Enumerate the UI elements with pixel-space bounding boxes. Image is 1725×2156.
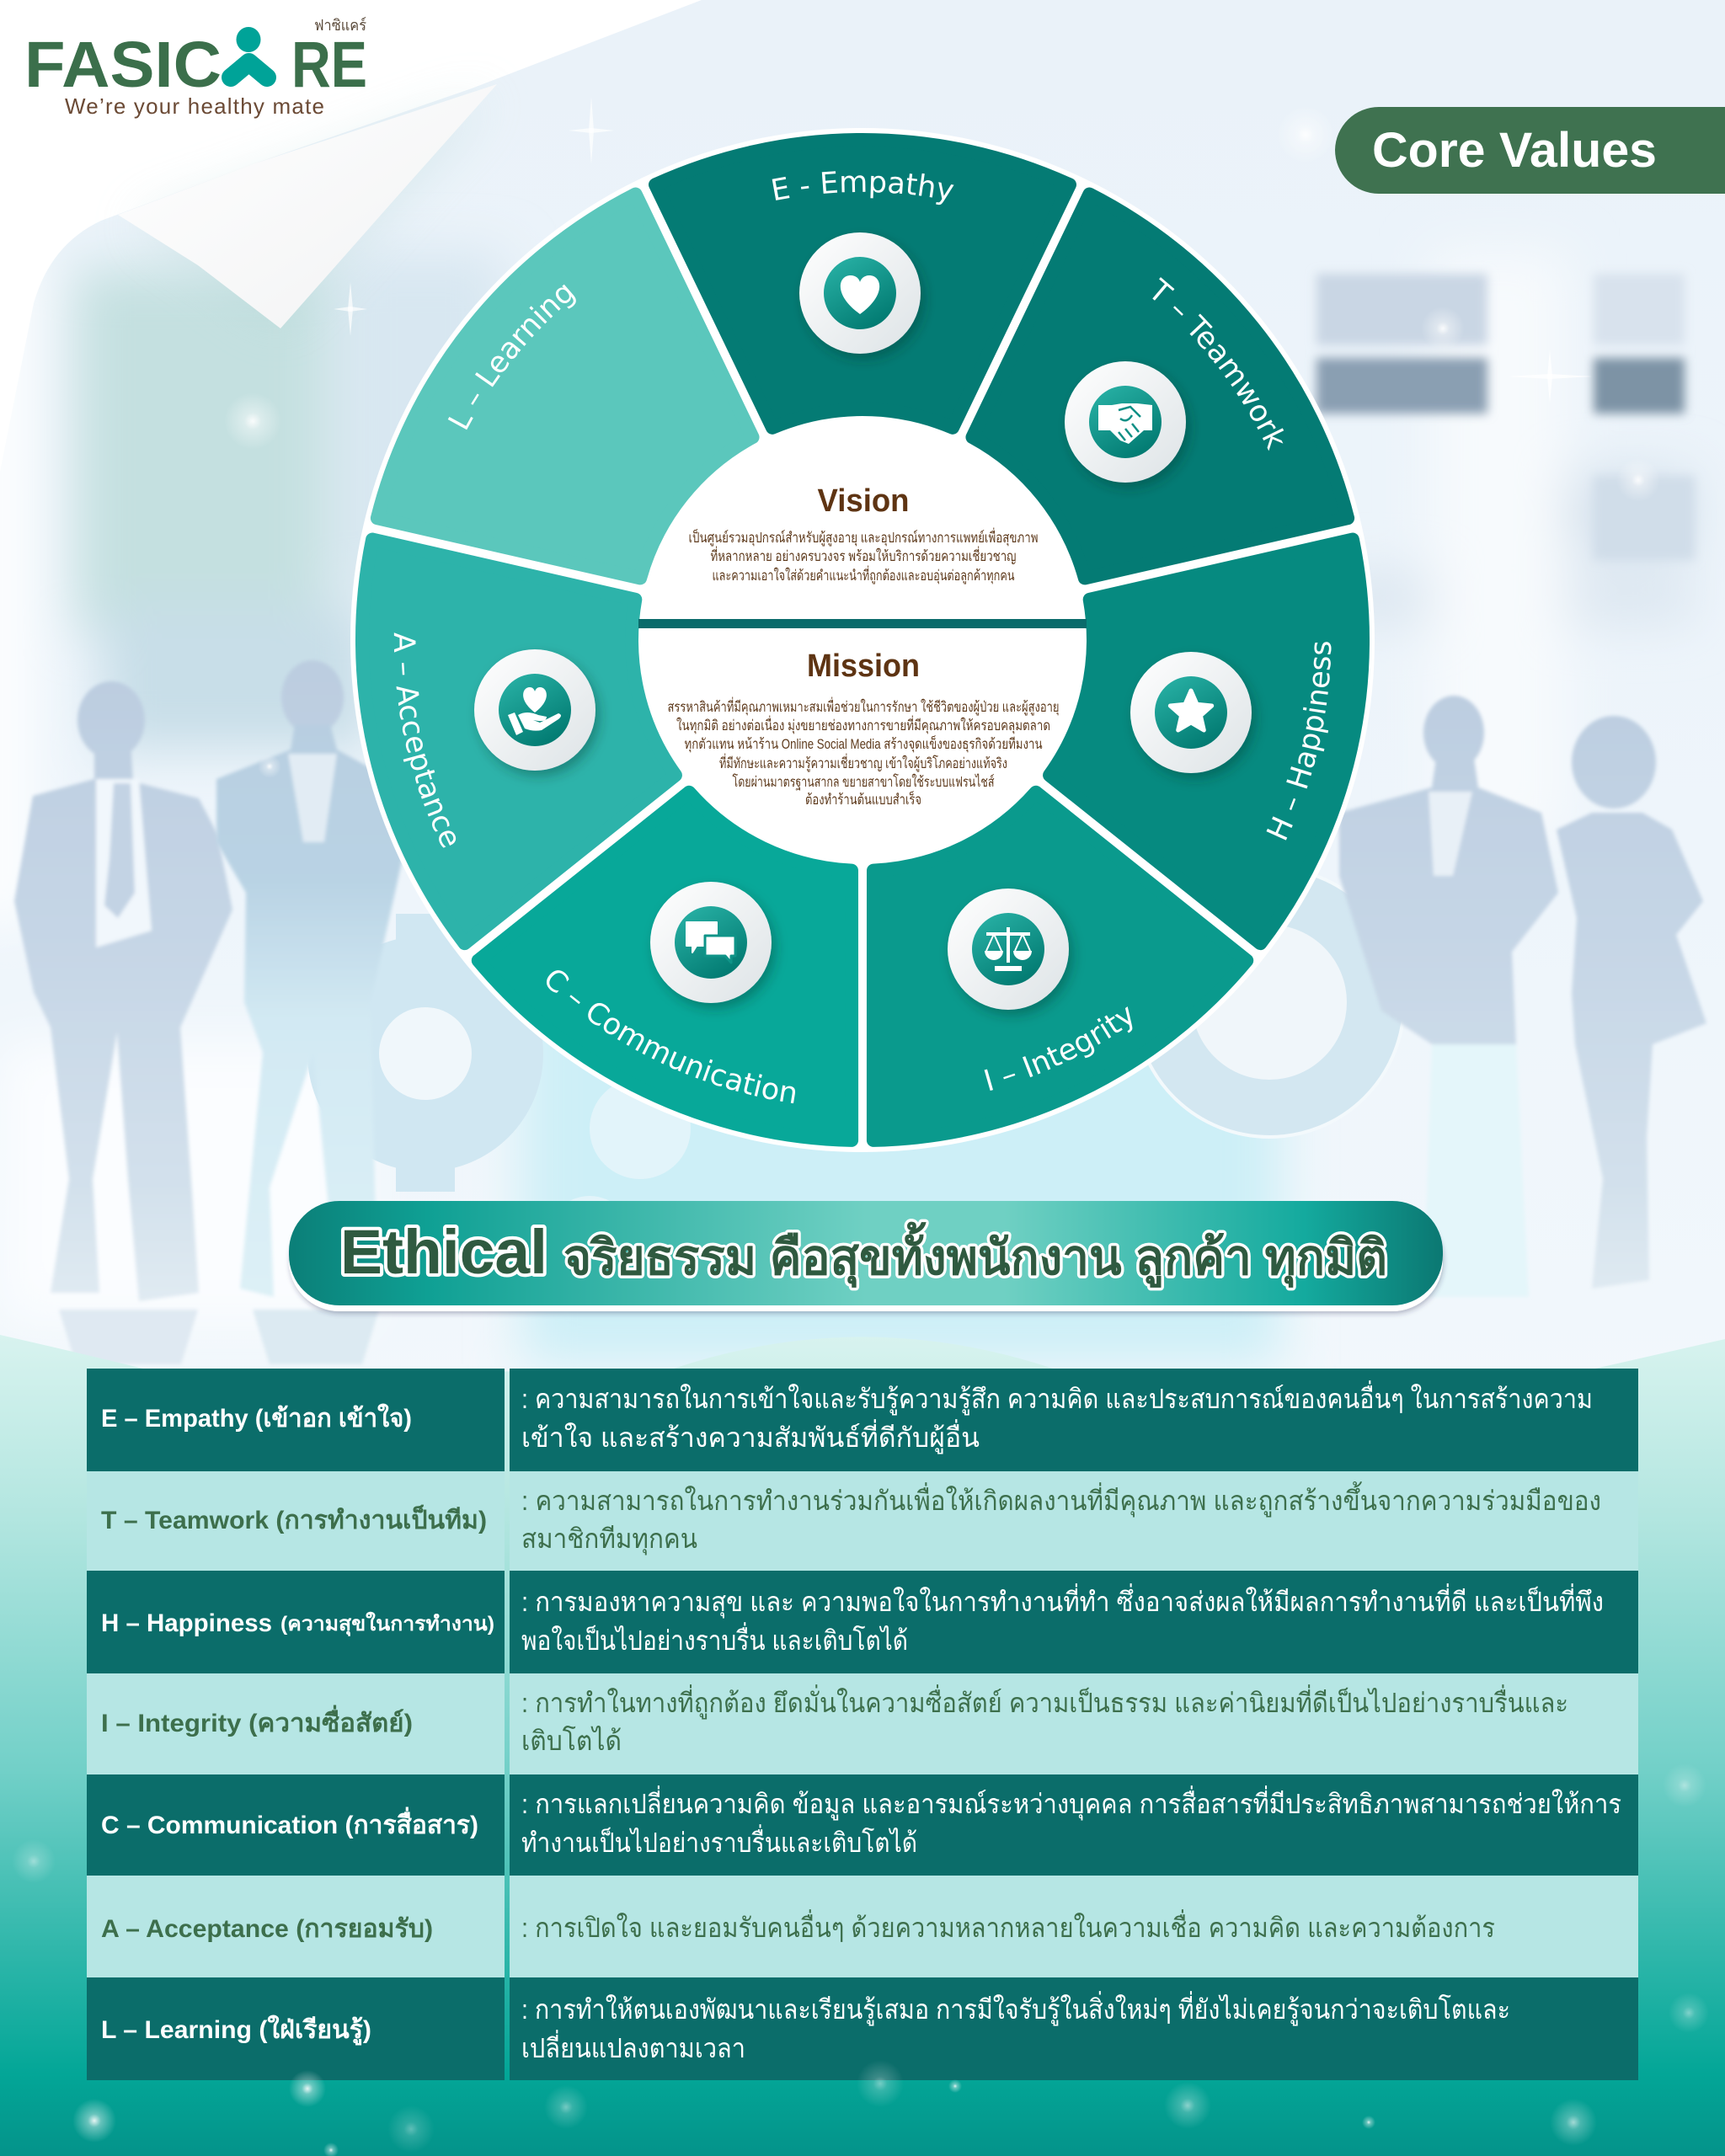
row: teamwork: T – Teamwork (การทำงานเป็นทีม) [101, 1504, 487, 1534]
row: communication: : การแลกเปลี่ยนความคิด ข้อมูล และอารมณ์ระหว่างบุคคล การสื่อสารที่มีประสิทธิภาพสามารถช่วยให้การ [521, 1785, 1621, 1821]
row: happiness: : การมองหาความสุข และ ความพอใจในการทำงานที่ทำ ซึ่งอาจส่งผลให้มีผลการทำงานที่ดี และเป็นที่พึง [521, 1583, 1604, 1619]
row: empathy: E – Empathy (เข้าอก เข้าใจ) [101, 1403, 412, 1433]
vision text: Vision [817, 483, 910, 519]
label: acceptance: A – Acceptance [394, 632, 457, 848]
mission text: ในทุกมิติ อย่างต่อเนื่อง มุ่งขยายช่องทางการขายที่มีคุณภาพให้ครอบคลุมตลาด [676, 715, 1050, 734]
icon: hand with heart [474, 649, 595, 771]
row: happiness: (ความสุขในการทำงาน) [280, 1611, 494, 1637]
silhouette: woman [1557, 716, 1706, 1289]
label: teamwork: T – Teamwork [1152, 277, 1284, 451]
label: happiness: H – Happiness [1267, 642, 1331, 841]
row: happiness: พอใจเป็นไปอย่างราบรื่น และเติบโตได้ [521, 1622, 908, 1656]
row: empathy [87, 1369, 1638, 1471]
mission text: ที่มีทักษะและความรู้ความเชี่ยวชาญ เข้าใจผู้บริโภคอย่างแท้จริง [719, 753, 1007, 772]
core values wheel [350, 128, 1375, 1152]
divider band [638, 619, 1087, 628]
row: integrity: : การทำในทางที่ถูกต้อง ยึดมั่นในความซื่อสัตย์ ความเป็นธรรม และค่านิยมที่ดีเป็นไปอย่างราบรื่นและ [521, 1684, 1568, 1720]
ethical banner: จริยธรรม คือสุขทั้งพนักงาน ลูกค้า ทุกมิติ [563, 1222, 1387, 1289]
mission text: สรรหาสินค้าที่มีคุณภาพเหมาะสมเพื่อช่วยในการรักษา ใช้ชีวิตของผู้ป่วย และผู้สูงอายุ [667, 696, 1060, 716]
wedge: empathy [655, 140, 1070, 428]
label: empathy: E - Empathy [772, 171, 953, 205]
row: teamwork: : ความสามารถในการทำงานร่วมกันเพื่อให้เกิดผลงานที่มีคุณภาพ และถูกสร้างขึ้นจากความร่วมมือของ [521, 1481, 1601, 1518]
logo: We’re your healthy mate [65, 93, 324, 119]
row: acceptance: A – Acceptance (การยอมรับ) [101, 1915, 433, 1943]
row: communication: ทำงานเป็นไปอย่างราบรื่นและเติบโตได้ [521, 1824, 917, 1858]
row: acceptance: : การเปิดใจ และยอมรับคนอื่นๆ ด้วยความหลากหลายในความเชื่อ ความคิด และความต้องการ [521, 1909, 1495, 1943]
background: lower teal gradient [0, 1335, 1725, 2156]
mission text: ต้องทำร้านต้นแบบสำเร็จ [805, 790, 921, 808]
row: happiness: H – Happiness [101, 1609, 272, 1637]
mission text [667, 648, 1060, 808]
row: empathy: เข้าใจ และสร้างความสัมพันธ์ที่ดีกับผู้อื่น [521, 1419, 980, 1454]
ethical banner [289, 1201, 1443, 1311]
bokeh lights [12, 1764, 1709, 2156]
row: integrity: I – Integrity (ความซื่อสัตย์) [101, 1705, 413, 1737]
silhouette: man left [14, 681, 232, 1364]
row: acceptance [87, 1876, 1638, 1977]
icon: star [1130, 652, 1252, 773]
silhouette: man right [1339, 696, 1558, 1297]
logo: ฟาซิแคร์ [314, 17, 366, 34]
wedge: acceptance [328, 485, 702, 953]
silhouette: man second [216, 660, 404, 1364]
logo: RE [291, 29, 367, 101]
vision text [689, 483, 1038, 584]
icon: handshake [1065, 361, 1186, 483]
row: empathy: : ความสามารถในการเข้าใจและรับรู้ความรู้สึก ความคิด และประสบการณ์ของคนอื่นๆ ในการสร้างความ [521, 1380, 1593, 1416]
vision text: และความเอาใจใส่ด้วยคำแนะนำที่ถูกต้องและอบอุ่นต่อลูกค้าทุกคน [713, 565, 1015, 584]
sparkles [224, 97, 1660, 778]
label: learning: L – Learning [448, 285, 576, 430]
mission text: โดยผ่านมาตรฐานสากล ขยายสาขาโดยใช้ระบบแฟรนไชส์ [733, 773, 995, 791]
label: communication: C – Communication [547, 970, 795, 1103]
row: teamwork [87, 1471, 1638, 1571]
wedge: integrity [768, 742, 1266, 1181]
row: integrity: เติบโตได้ [521, 1726, 622, 1756]
mission text: Mission [807, 648, 920, 684]
vision text: ที่หลากหลาย อย่างครบวงจร พร้อมให้บริการด้วยความเชี่ยวชาญ [711, 546, 1016, 564]
row: happiness [87, 1571, 1638, 1673]
row: learning [87, 1977, 1638, 2080]
row: learning: : การทำให้ตนเองพัฒนาและเรียนรู้เสมอ การมีใจรับรู้ในสิ่งใหม่ๆ ที่ยังไม่เคยรู้จนกว่าจะเติบโตและ [521, 1991, 1510, 2026]
logo [24, 17, 367, 119]
page curl top-left [0, 0, 702, 472]
core values tab: Core Values [1372, 123, 1657, 178]
row: learning: เปลี่ยนแปลงตามเวลา [521, 2030, 745, 2063]
icon: heart [799, 232, 921, 354]
gears background [307, 867, 1404, 1280]
wedge: learning [342, 166, 825, 670]
icon: chat bubbles [650, 882, 772, 1003]
values table [87, 1369, 1638, 2080]
wedge: teamwork [900, 166, 1383, 670]
row: integrity [87, 1673, 1638, 1774]
icon: scales [948, 889, 1069, 1010]
wedge: happiness [1023, 485, 1397, 953]
wedge: communication [459, 742, 957, 1181]
label: integrity: I – Integrity [984, 1006, 1132, 1091]
vision text: เป็นศูนย์รวมอุปกรณ์สำหรับผู้สูงอายุ และอุปกรณ์ทางการแพทย์เพื่อสุขภาพ [689, 527, 1038, 547]
row: teamwork: สมาชิกทีมทุกคน [521, 1524, 697, 1556]
ethical banner: Ethical [340, 1217, 547, 1287]
logo: FASIC [24, 29, 222, 101]
mission text: ทุกตัวแทน หน้าร้าน Online Social Media สร้างจุดแข็งของธุรกิจด้วยทีมงาน [684, 734, 1043, 753]
row: communication: C – Communication (การสื่อสาร) [101, 1806, 478, 1839]
core values tab [1335, 107, 1725, 194]
row: learning: L – Learning (ใฝ่เรียนรู้) [101, 2015, 371, 2046]
row: communication [87, 1774, 1638, 1876]
